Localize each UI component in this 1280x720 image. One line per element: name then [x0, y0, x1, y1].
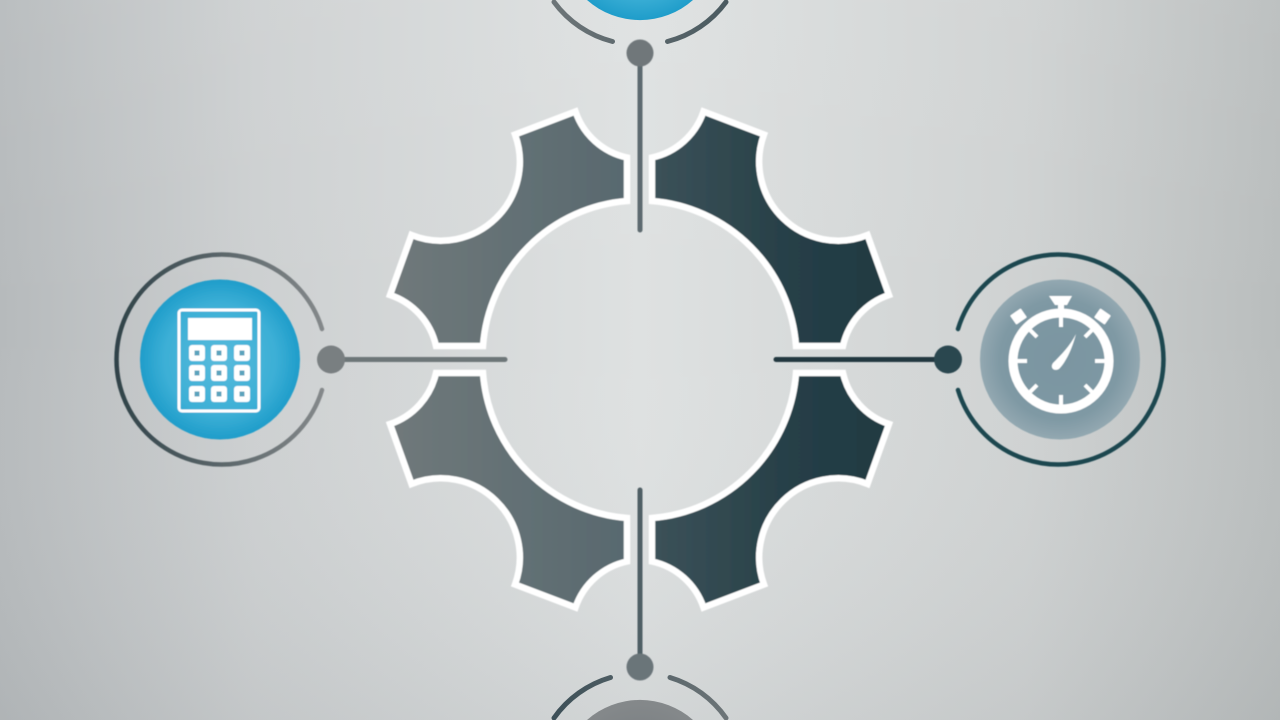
connector: top [626, 40, 654, 230]
icon: calculator [179, 310, 259, 411]
ring: right [958, 254, 1163, 464]
connector: right [776, 346, 962, 374]
icon: stopwatch [1010, 296, 1111, 409]
gear [390, 112, 889, 608]
ring: bottom [554, 678, 726, 718]
icon disc: left [140, 280, 300, 440]
gear segment: bottom right [652, 373, 889, 608]
gear segment: top left [390, 112, 627, 346]
ring: left [117, 254, 322, 465]
gear segment: bottom left [390, 373, 627, 608]
ring: top [554, 2, 726, 42]
node: top, blue [554, 0, 726, 42]
gear segment: top right [652, 112, 889, 346]
icon disc: bottom [587, 700, 693, 720]
node: left, calculator [117, 254, 322, 465]
icon disc: right [980, 280, 1140, 440]
connector: left [317, 346, 505, 374]
icon disc: top [587, 0, 693, 20]
node: right, stopwatch [958, 254, 1163, 464]
node: bottom, grey [554, 678, 726, 720]
connector: bottom [626, 490, 654, 680]
